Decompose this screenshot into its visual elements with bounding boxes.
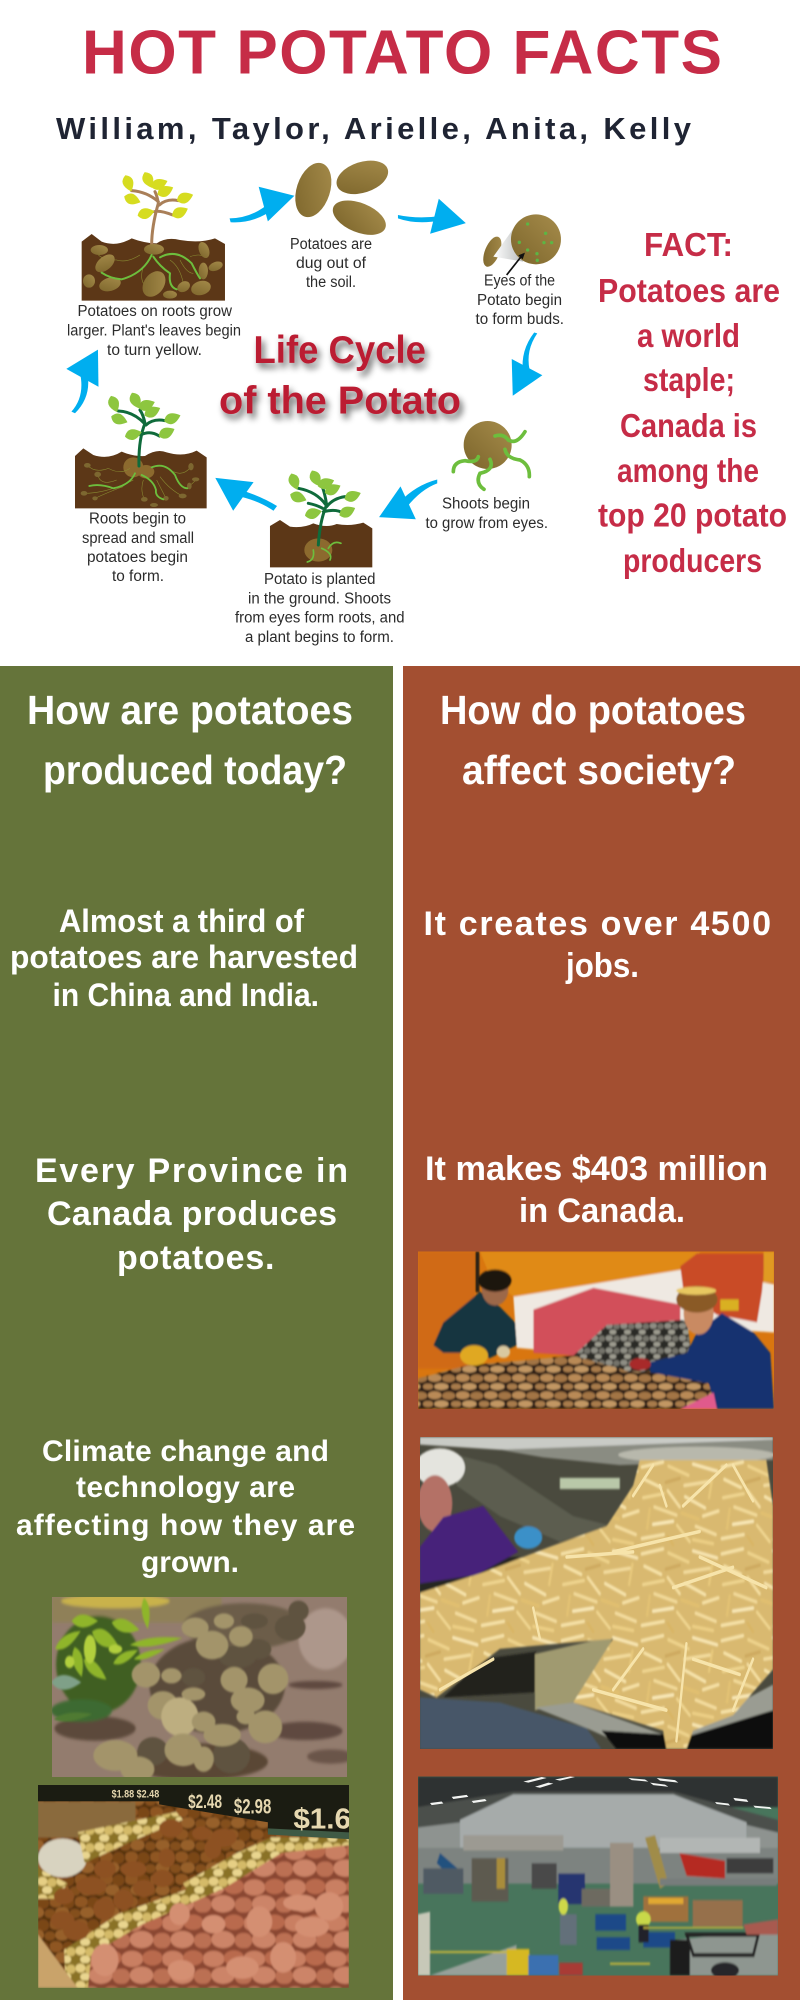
diagram captions: dug out of [296,255,367,272]
diagram captions: from eyes form roots, and [235,610,404,626]
diagram captions: to form buds. [476,311,564,328]
stage: mature plant with yellow leaves [82,170,225,301]
heading: how are potatoes produced: produced today? [43,747,347,793]
photo: market potato bins [38,1785,351,1988]
diagram heading [219,329,461,422]
text: revenue [425,1150,768,1230]
fact callout [598,226,787,579]
stage: roots spreading [75,391,207,508]
heading: how do potatoes affect society: affect society? [462,747,736,793]
fact callout: staple; [643,361,735,398]
fact callout: Potatoes are [598,272,780,309]
photo: packing factory interior [418,1776,778,1976]
diagram captions: Potatoes are [290,236,372,253]
stage: planted potato [270,468,372,567]
text: harvest share: in China and India. [52,977,319,1013]
photo: potatoes in field [52,1597,347,1777]
stage: shoots from eyes [453,421,529,489]
authors line: William, Taylor, Arielle, Anita, Kelly [56,111,692,146]
diagram captions: a plant begins to form. [245,629,394,646]
diagram captions: Potatoes on roots grow [78,303,233,320]
text: climate and technology: Climate change and [42,1435,329,1468]
fact callout: producers [623,542,762,579]
cycle arrows [66,187,542,519]
fact callout: FACT: [644,226,733,263]
arrow: stage 5 to 6 [215,478,277,511]
text: jobs: It creates over 4500 [424,905,771,943]
fact callout: top 20 potato [598,496,787,534]
text: revenue: It makes $403 million [425,1150,768,1188]
diagram captions: to form. [112,568,164,585]
diagram captions: Eyes of the [484,272,555,290]
photo: market potato bins: $1.88 $2.48 [112,1788,159,1801]
text: harvest share: Almost a third of [59,903,304,939]
diagram captions: to turn yellow. [107,342,202,359]
arrow: stage 1 to 2 [230,187,294,222]
diagram captions: to grow from eyes. [426,515,548,532]
diagram captions: Shoots begin [442,496,530,512]
text: revenue: in Canada. [519,1192,685,1230]
heading: how do potatoes affect society [440,687,746,793]
diagram captions: Potato is planted [264,571,376,588]
photo: market potato bins: $1.6 [293,1804,351,1835]
diagram captions: in the ground. Shoots [248,590,391,608]
diagram captions: Roots begin to [89,510,186,528]
fact callout: a world [637,317,740,354]
text: climate and technology: affecting how they are [16,1509,355,1542]
photo: workers sorting potatoes [418,1252,774,1409]
diagram heading: of the Potato [219,380,461,422]
text: jobs: jobs. [565,947,639,985]
diagram heading: Life Cycle [254,329,426,372]
life cycle diagram [66,155,564,646]
diagram captions: spread and small [82,530,194,547]
arrow: stage 4 to 5 [379,480,437,519]
photo: market potato bins: $2.48 [188,1791,222,1813]
photo: market potato bins: $2.98 [234,1795,271,1818]
text: harvest share: potatoes are harvested [10,939,358,975]
text: every province: Every Province in [35,1152,348,1190]
heading: how are potatoes produced: How are potatoes [27,687,353,733]
diagram captions: the soil. [306,274,356,291]
stage: dug potatoes [289,155,561,275]
text: climate and technology: grown. [141,1546,239,1579]
diagram captions: Potato begin [477,292,562,309]
panel: production (green) [0,666,393,2000]
text: climate and technology: technology are [76,1471,295,1504]
diagram captions [67,236,564,646]
arrow: stage 6 to 1 [66,350,98,413]
fact callout: among the [617,452,759,489]
diagram captions: potatoes begin [87,549,188,566]
heading: how do potatoes affect society: How do potatoes [440,687,746,733]
diagram captions: larger. Plant's leaves begin [67,322,241,340]
text: every province: Canada produces [47,1195,337,1233]
text: every province [35,1152,348,1277]
stage: potato eyes with buds [480,214,561,275]
panel: society (brown) [403,666,800,2000]
text: climate and technology [16,1435,355,1579]
text: every province: potatoes. [117,1239,274,1277]
title: HOT POTATO FACTS [82,18,722,88]
text: harvest share [10,903,358,1013]
fact callout: Canada is [620,407,757,444]
heading: how are potatoes produced [27,687,353,793]
text: jobs [424,905,771,985]
photo: french fries on conveyor [420,1437,773,1749]
arrow: stage 3 to 4 [512,333,542,396]
arrow: stage 2 to 3 [398,199,466,234]
